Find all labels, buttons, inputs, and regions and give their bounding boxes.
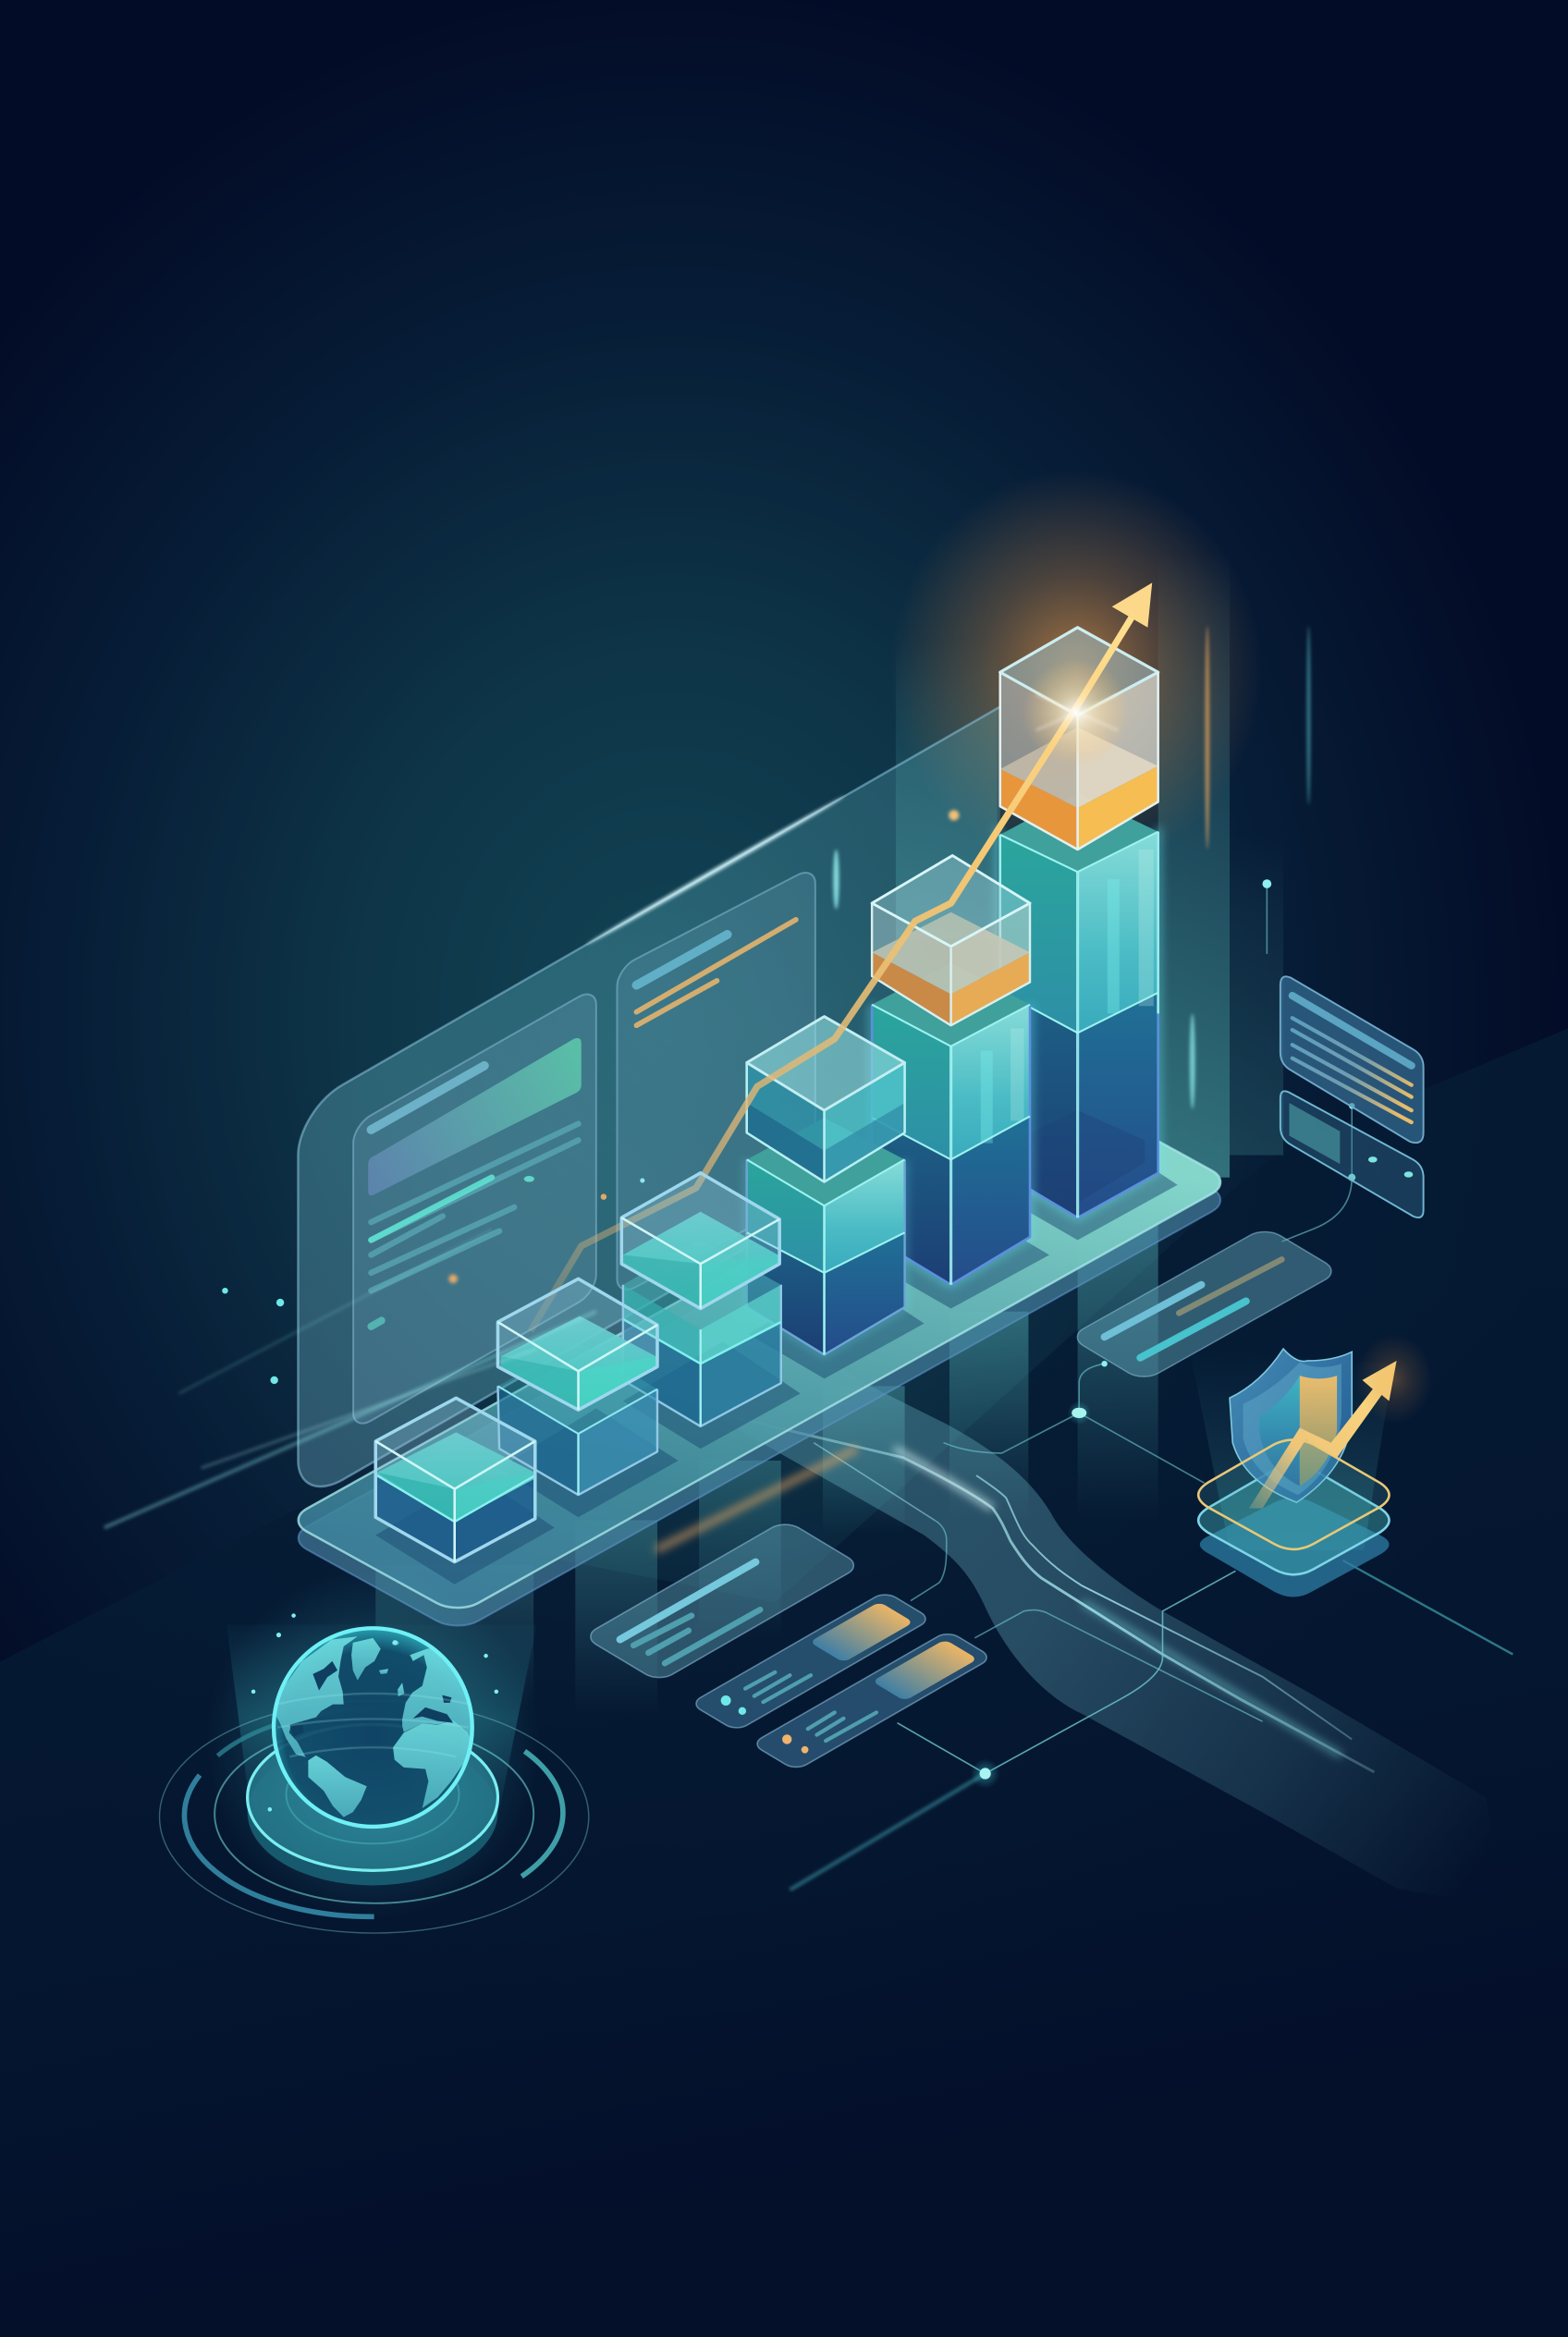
globe particles	[251, 1613, 498, 1811]
panel: floor card B	[690, 1591, 932, 1731]
panel: floor card A	[582, 1520, 862, 1682]
vertical sparkle lines	[833, 626, 1311, 1109]
bar 1 dark base	[375, 1475, 535, 1562]
light streaks from left	[104, 1230, 596, 1528]
bar 4	[747, 1017, 905, 1355]
shield badge	[1190, 1334, 1432, 1597]
bar 4 top cube	[747, 1063, 825, 1182]
connector nodes	[971, 879, 1355, 1789]
globe glow	[205, 1568, 540, 1920]
rings seen through the sphere	[276, 1694, 470, 1756]
card B tan block	[809, 1602, 913, 1662]
ring arcs	[521, 1751, 563, 1877]
shield inner right	[1300, 1376, 1337, 1486]
shield inner left	[1259, 1376, 1300, 1486]
orange glow behind top bar	[889, 470, 1263, 872]
connector lines	[790, 884, 1513, 1890]
platform	[287, 1088, 1232, 1633]
bar 5	[872, 855, 1030, 1285]
panel heading bar	[636, 935, 728, 985]
panel: floor card C	[752, 1631, 993, 1770]
card A lines	[620, 1562, 755, 1639]
bar 1	[375, 1398, 535, 1562]
bar 3	[621, 1173, 781, 1426]
back wall panel	[297, 706, 1000, 1488]
card heading line	[1292, 996, 1412, 1066]
sphere and continents	[271, 1628, 478, 1827]
bar 6 orange band	[1000, 769, 1078, 850]
card C lines	[808, 1712, 876, 1741]
globe hologram	[160, 1568, 589, 1933]
bar 5 orange band	[872, 952, 951, 1025]
bar 6	[998, 628, 1158, 1217]
card dots	[1368, 1156, 1378, 1163]
panel text lines	[371, 1124, 579, 1327]
bar 6 lower block	[1000, 793, 1158, 872]
panel: floating lower right card	[1280, 1091, 1424, 1217]
bar shadows	[375, 1136, 1178, 1585]
floating particles	[222, 810, 959, 1384]
card B lines	[745, 1672, 811, 1702]
bar 1 teal liquid	[377, 1432, 535, 1522]
arrow head	[1112, 582, 1152, 628]
bar 3 lower block	[623, 1240, 781, 1329]
floor plane	[0, 1028, 1568, 2337]
spark on top bar	[1023, 659, 1130, 766]
card B dots	[721, 1695, 731, 1706]
rising line chart arrow	[531, 582, 1152, 1331]
bar 2	[497, 1279, 657, 1495]
data road	[655, 1297, 1505, 1908]
globe beam	[227, 1624, 536, 1811]
disc	[248, 1739, 497, 1885]
bar 5 lower block	[872, 963, 1030, 1046]
bar 4 lower block	[747, 1118, 905, 1205]
card text lines	[1292, 1018, 1412, 1122]
card C tan block	[872, 1639, 978, 1701]
bar 6 glass cube	[1000, 672, 1078, 808]
bar 5 glass cube	[872, 903, 951, 994]
badge orange ring	[1198, 1439, 1390, 1549]
shield body	[1230, 1349, 1352, 1502]
platform top	[287, 1088, 1232, 1614]
panel heading bar	[371, 1066, 484, 1130]
light beams above the chart	[896, 552, 1283, 1178]
road second line	[976, 1475, 1352, 1739]
road glow	[894, 1449, 993, 1509]
bar 2 glass cube	[497, 1279, 657, 1410]
card teal block	[1290, 1103, 1340, 1164]
floor card lines	[1105, 1285, 1201, 1337]
badge blue ring	[1198, 1465, 1390, 1574]
bar 2 lower block	[497, 1341, 657, 1434]
panel orange lines	[636, 920, 796, 1025]
panel: left dashboard	[353, 986, 596, 1431]
bar 3 glass cube	[621, 1173, 779, 1309]
wall top highlight	[585, 794, 846, 947]
dark seas	[289, 1661, 453, 1737]
badge base	[1200, 1498, 1390, 1597]
platform underside	[287, 1106, 1232, 1633]
shield beam	[1190, 1349, 1393, 1550]
light beams below the platform	[375, 1222, 1158, 1714]
panel: right dashboard	[617, 865, 815, 1297]
orange streak	[655, 1449, 857, 1550]
card C dots	[782, 1734, 791, 1744]
shield arrow	[1249, 1361, 1397, 1509]
panel: floating right card	[1280, 976, 1424, 1143]
panel: floor card near shield	[1069, 1227, 1340, 1382]
outer rings	[160, 1701, 589, 1933]
panel highlighted block	[368, 1038, 582, 1195]
bar 1 glass	[375, 1398, 535, 1522]
road bright line	[721, 1414, 1374, 1772]
